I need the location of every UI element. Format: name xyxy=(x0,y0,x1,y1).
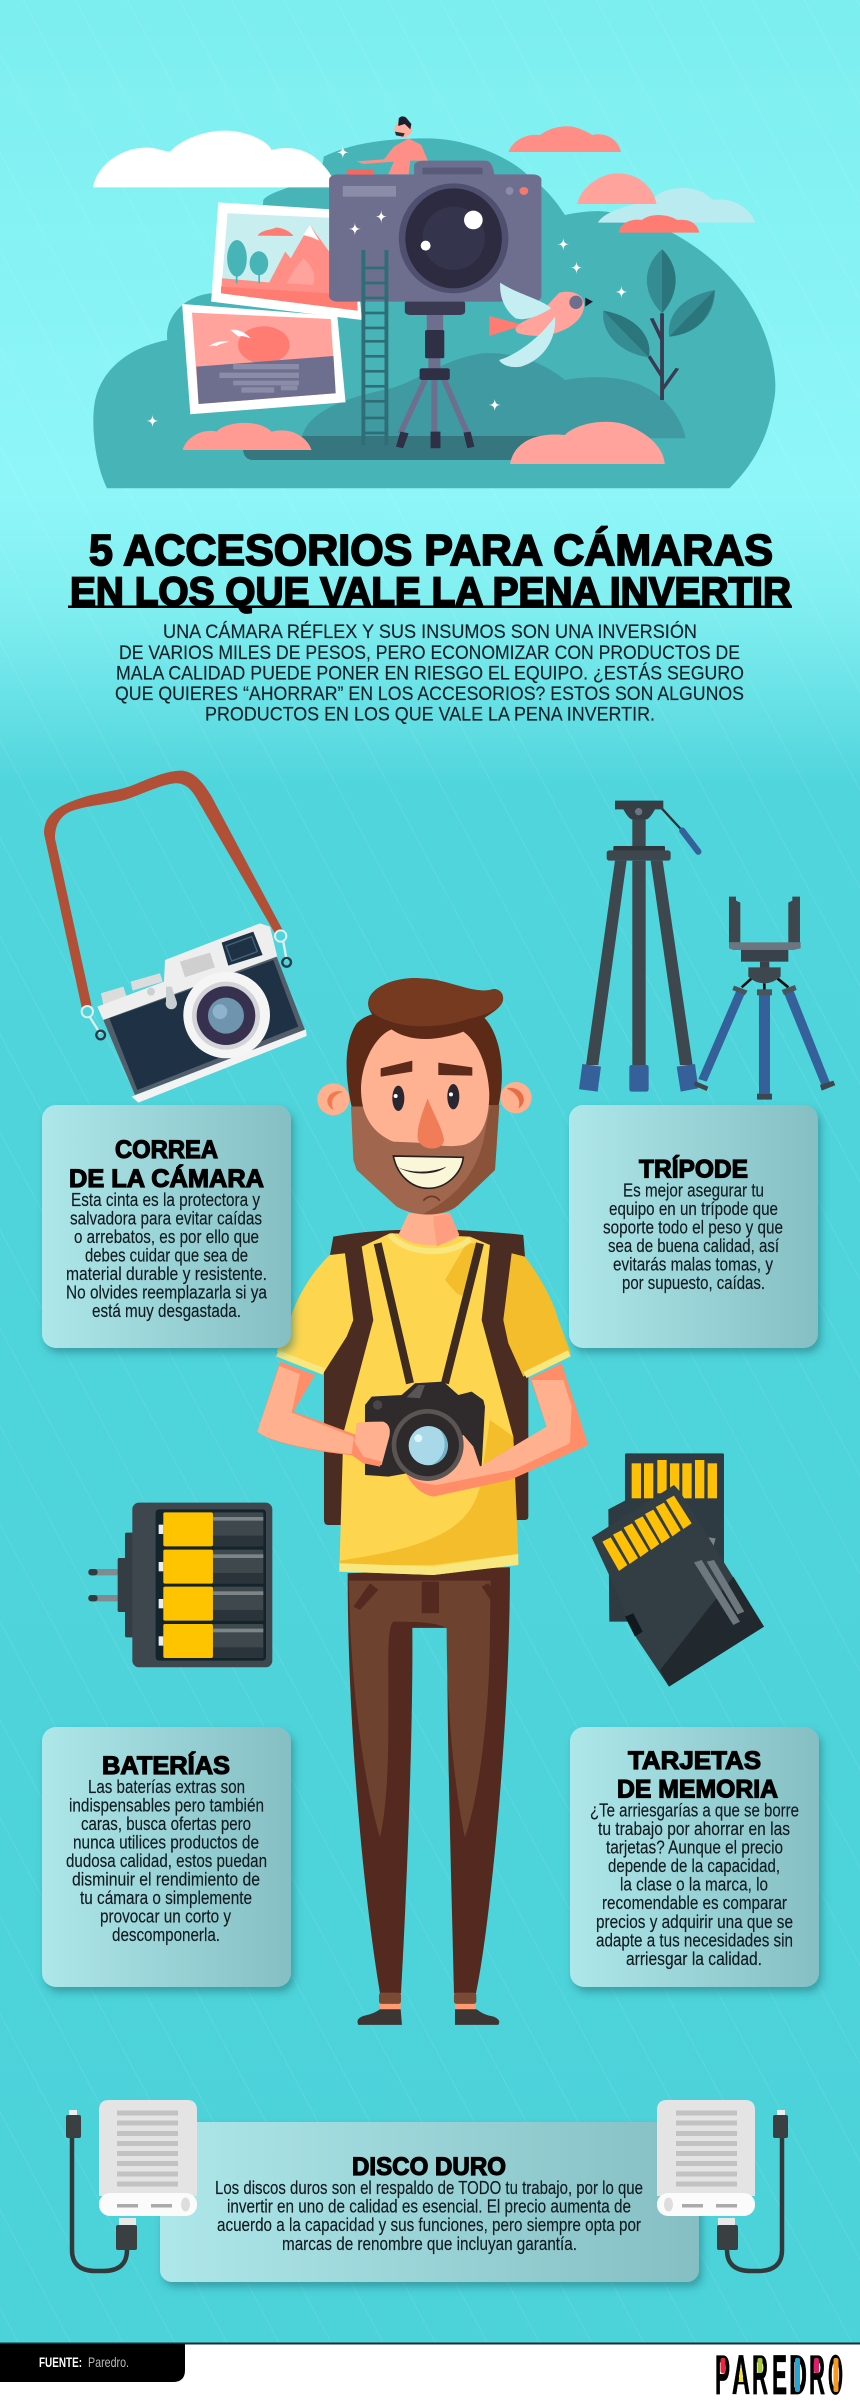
card: tarjetas de memoria: arriesgar la calidad. xyxy=(626,1948,762,1969)
card: trípode: equipo en un trípode que xyxy=(609,1198,778,1219)
tripod of big camera xyxy=(396,300,474,448)
logo: E xyxy=(772,2343,787,2406)
card: tarjetas de memoria: la clase o la marca, lo xyxy=(620,1874,768,1894)
logo: P xyxy=(715,2343,730,2406)
card: baterías: BATERÍAS xyxy=(102,1751,230,1780)
card: disco duro xyxy=(160,2122,699,2282)
card: tarjetas de memoria xyxy=(570,1727,819,1987)
logo: A xyxy=(732,2343,750,2406)
intro text: PRODUCTOS EN LOS QUE VALE LA PENA INVERTIR. xyxy=(205,704,655,726)
bird xyxy=(489,283,593,367)
card: baterías: indispensables pero también xyxy=(69,1794,264,1816)
logo: R xyxy=(809,2343,825,2406)
logo: R xyxy=(752,2343,768,2406)
card: baterías: disminuir el rendimiento de xyxy=(72,1868,260,1890)
icon: hard drive right xyxy=(657,2100,788,2271)
source tab: Paredro. xyxy=(88,2354,129,2370)
backpack xyxy=(324,1230,528,1525)
card: baterías: Las baterías extras son xyxy=(88,1776,245,1797)
intro text: DE VARIOS MILES DE PESOS, PERO ECONOMIZAR CON PRODUCTOS DE xyxy=(119,643,740,664)
card: baterías xyxy=(42,1727,291,1987)
card: trípode: TRÍPODE xyxy=(639,1154,748,1184)
card: correa de la cámara: material durable y resistente. xyxy=(66,1263,267,1284)
icon: tripods xyxy=(579,801,835,1100)
camera body xyxy=(97,923,307,1103)
intro text: UNA CÁMARA RÉFLEX Y SUS INSUMOS SON UNA INVERSIÓN xyxy=(163,621,697,643)
card: baterías: nunca utilices productos de xyxy=(73,1832,259,1852)
camera held in hands xyxy=(257,1362,588,1497)
card: correa de la cámara: No olvides reemplazarla si ya xyxy=(66,1282,268,1302)
photo: sunset xyxy=(182,304,346,414)
card: disco duro: DISCO DURO xyxy=(352,2153,506,2181)
right arm xyxy=(407,1363,588,1497)
card: tarjetas de memoria: ¿Te arriesgarías a que se borre xyxy=(590,1800,799,1820)
camera straps xyxy=(378,1243,480,1383)
card: baterías: caras, busca ofertas pero xyxy=(81,1813,251,1834)
card: trípode: soporte todo el peso y que xyxy=(603,1216,783,1238)
clouds xyxy=(93,126,755,464)
card: trípode: sea de buena calidad, así xyxy=(608,1235,780,1256)
card: correa de la cámara: Esta cinta es la protectora y xyxy=(71,1189,261,1210)
card: tarjetas de memoria: tu trabajo por ahorrar en las xyxy=(598,1818,790,1839)
big camera xyxy=(329,161,541,302)
man with camera xyxy=(257,978,588,2025)
shirt xyxy=(277,1233,571,1575)
sparkles xyxy=(146,146,627,428)
hero teal hill backdrop xyxy=(93,138,775,488)
title: EN LOS QUE VALE LA PENA INVERTIR xyxy=(70,570,791,614)
card: disco duro: acuerdo a la capacidad y sus funciones, pero siempre opta por xyxy=(217,2214,641,2235)
card: correa de la cámara: salvadora para evitar caídas xyxy=(70,1208,262,1228)
card: tarjetas de memoria: TARJETAS xyxy=(628,1747,761,1775)
card: baterías: dudosa calidad, estos puedan xyxy=(66,1850,267,1871)
intro text: QUE QUIERES “AHORRAR” EN LOS ACCESORIOS? ESTOS SON ALGUNOS xyxy=(115,684,744,705)
hero dark hill xyxy=(302,353,686,438)
plant xyxy=(603,249,715,400)
card: tarjetas de memoria: precios y adquirir una que se xyxy=(596,1911,793,1932)
card: correa de la cámara: o arrebatos, es por ello que xyxy=(74,1226,259,1247)
small person on camera xyxy=(347,116,428,175)
card: baterías: provocar un corto y xyxy=(100,1906,232,1926)
trousers xyxy=(348,1567,510,1993)
hero ground xyxy=(243,436,549,460)
card: trípode: por supuesto, caídas. xyxy=(622,1272,765,1293)
intro text xyxy=(115,621,744,726)
title: 5 ACCESORIOS PARA CÁMARAS xyxy=(89,525,773,575)
hero illustration: camera scene xyxy=(93,116,775,488)
icon: battery charger xyxy=(88,1503,272,1667)
battery 4 xyxy=(159,1624,263,1658)
card: tarjetas de memoria: depende de la capacidad, xyxy=(608,1855,780,1876)
card: trípode: evitarás malas tomas, y xyxy=(613,1254,774,1274)
ladder xyxy=(361,250,388,445)
small tripod xyxy=(694,897,835,1100)
strap rings xyxy=(82,930,291,1039)
card: tarjetas de memoria: DE MEMORIA xyxy=(617,1776,778,1804)
left arm xyxy=(257,1362,363,1457)
photo: mountain landscape xyxy=(211,202,362,320)
card: correa de la cámara: DE LA CÁMARA xyxy=(69,1164,264,1193)
card: correa de la cámara: está muy desgastada. xyxy=(92,1300,241,1321)
card: correa de la cámara xyxy=(42,1105,291,1348)
lens xyxy=(392,1409,464,1481)
icon: memory cards xyxy=(592,1453,764,1687)
icon: hard drive left xyxy=(66,2100,197,2271)
source tab: FUENTE: xyxy=(39,2354,82,2370)
card: baterías: tu cámara o simplemente xyxy=(80,1887,252,1908)
title xyxy=(68,525,792,614)
head xyxy=(317,978,532,1215)
card: disco duro: Los discos duros son el respaldo de TODO tu trabajo, por lo que xyxy=(215,2177,643,2198)
battery 1 xyxy=(159,1512,263,1546)
card: trípode: Es mejor asegurar tu xyxy=(623,1180,764,1200)
card: tarjetas de memoria: recomendable es comparar xyxy=(602,1892,787,1913)
icon: vintage camera with strap xyxy=(44,771,307,1103)
battery 3 xyxy=(159,1587,263,1621)
card: tarjetas de memoria: tarjetas? Aunque el precio xyxy=(606,1836,783,1858)
card: correa de la cámara: CORREA xyxy=(115,1136,218,1164)
card: disco duro: marcas de renombre que incluyan garantía. xyxy=(282,2233,577,2254)
logo xyxy=(715,2343,843,2406)
card: tarjetas de memoria: adapte a tus necesidades sin xyxy=(596,1930,793,1950)
footer xyxy=(0,2342,860,2408)
back card xyxy=(608,1453,724,1622)
card: correa de la cámara: debes cuidar que sea de xyxy=(85,1244,248,1266)
logo: D xyxy=(789,2343,807,2406)
large tripod xyxy=(579,801,698,1092)
shoes xyxy=(357,1993,499,2025)
front card xyxy=(592,1485,764,1687)
intro text: MALA CALIDAD PUEDE PONER EN RIESGO EL EQUIPO. ¿ESTÁS SEGURO xyxy=(116,664,744,684)
neck xyxy=(390,1213,470,1251)
card: baterías: descomponerla. xyxy=(112,1924,220,1945)
battery 2 xyxy=(159,1550,263,1584)
source tab xyxy=(0,2344,185,2382)
card: trípode xyxy=(569,1105,818,1348)
strap xyxy=(44,771,283,1007)
card: disco duro: invertir en uno de calidad es esencial. El precio aumenta de xyxy=(227,2196,631,2216)
